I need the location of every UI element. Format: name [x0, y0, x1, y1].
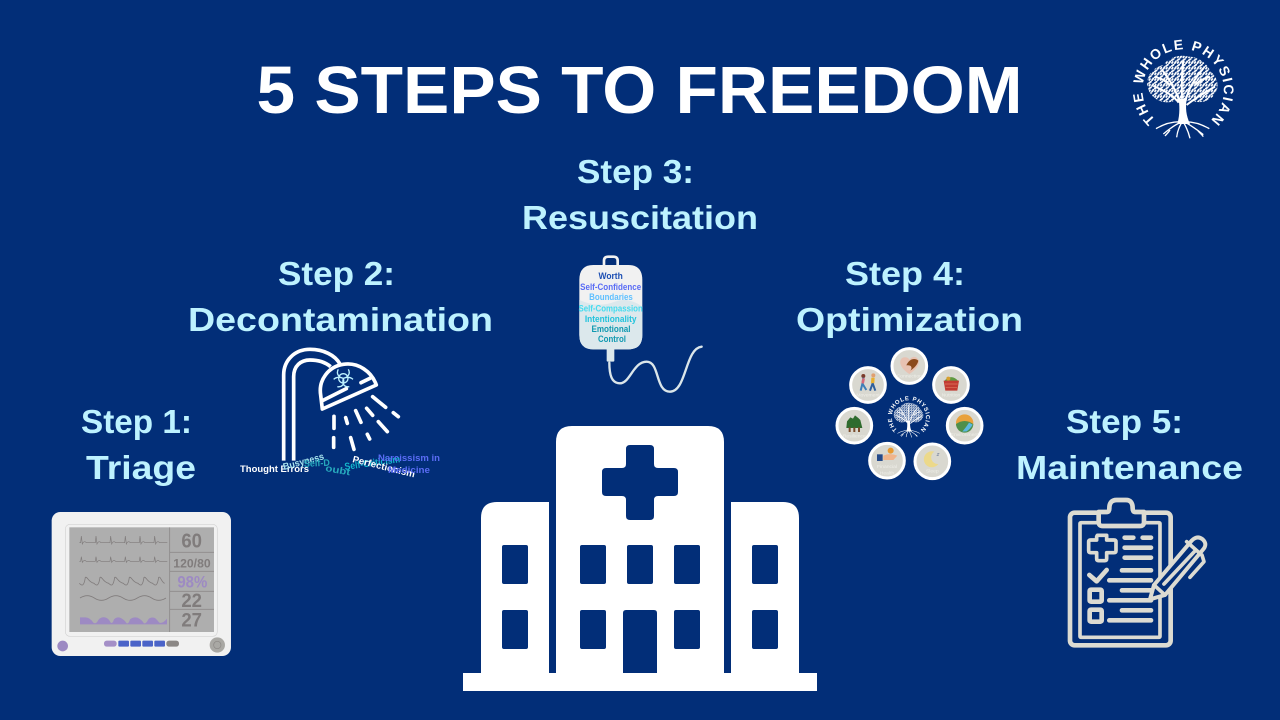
icon: decontamination shower	[284, 349, 398, 461]
diagram: wellness wheel	[836, 347, 984, 480]
badge: environment	[947, 408, 982, 443]
heading: step 2: Decontamination	[188, 301, 493, 338]
icon: patient monitor: 22	[181, 591, 202, 612]
badge: movement	[851, 368, 885, 402]
badge: resilience	[837, 408, 872, 443]
badge: connection: Connection	[897, 373, 922, 379]
heading: step 5	[1016, 403, 1243, 486]
badge: financial health	[870, 443, 904, 478]
title: 5 STEPS TO FREEDOM	[256, 53, 1022, 128]
heading: step 1	[81, 403, 196, 486]
heading: step 3: Resuscitation	[522, 199, 758, 236]
heading: step 1: Step 1:	[81, 403, 192, 440]
word cloud: decontamination topics: Perfectionism	[351, 454, 416, 480]
icon: patient monitor: 27	[181, 610, 202, 631]
logo: wheel centre: THE WHOLE PHYSICIAN	[888, 396, 930, 432]
badge: connection	[892, 349, 927, 383]
word cloud: decontamination topics: Narcissism in	[378, 453, 440, 464]
badge: nutrition: Nutrition	[942, 393, 960, 399]
word cloud: decontamination topics: Self-Criticism	[344, 454, 401, 473]
word cloud: decontamination topics: oubt	[324, 463, 352, 478]
icon: IV bag: Self-Confidence	[580, 282, 641, 292]
heading: step 3: Step 3:	[577, 153, 694, 190]
badge: environment: Environment	[951, 432, 979, 438]
logo: The Whole Physician: THE WHOLE PHYSICIAN	[1133, 40, 1234, 126]
icon: biohazard symbol	[334, 369, 353, 387]
icon: patient monitor: 120/80	[173, 557, 211, 571]
badge: sleep: Sleep	[926, 468, 939, 474]
icon: IV bag: Control	[598, 334, 626, 344]
badge: nutrition	[934, 368, 968, 402]
heading: step 5: Maintenance	[1016, 449, 1243, 486]
heading: step 4: Step 4:	[845, 255, 965, 292]
icon: IV bag	[578, 257, 702, 392]
icon: patient monitor	[52, 512, 231, 656]
word cloud: decontamination topics: Busyness	[282, 451, 325, 473]
icon: clipboard checklist	[1070, 500, 1205, 645]
heading: step 2	[188, 255, 493, 338]
heading: step 5: Step 5:	[1066, 403, 1183, 440]
icon: patient monitor: 98%	[177, 572, 207, 591]
icon: IV bag: Self-Compassion	[578, 303, 643, 313]
badge: sleep	[915, 444, 950, 479]
word cloud: decontamination topics: Thought Errors	[240, 464, 309, 475]
icon: IV bag: Boundaries	[589, 292, 633, 302]
word cloud: decontamination topics: Self-D	[304, 458, 330, 470]
icon: IV bag: Intentionality	[585, 314, 636, 324]
badge: financial health: Financial	[877, 464, 897, 470]
heading: step 4	[796, 255, 1023, 338]
heading: step 1: Triage	[86, 449, 196, 486]
badge: movement: Movement	[856, 393, 880, 399]
icon: IV bag: Worth	[598, 271, 623, 281]
heading: step 2: Step 2:	[278, 255, 395, 292]
icon: patient monitor: 60	[181, 531, 202, 553]
word cloud: decontamination topics	[240, 451, 440, 480]
icon: hospital building	[463, 426, 817, 691]
badge: resilience: Resilience	[843, 434, 866, 440]
badge: financial health: Health	[880, 470, 894, 476]
word cloud: decontamination topics: Medicine	[388, 465, 430, 476]
heading: step 4: Optimization	[796, 301, 1023, 338]
icon: IV bag: Emotional	[591, 324, 630, 334]
heading: step 3	[522, 153, 758, 236]
